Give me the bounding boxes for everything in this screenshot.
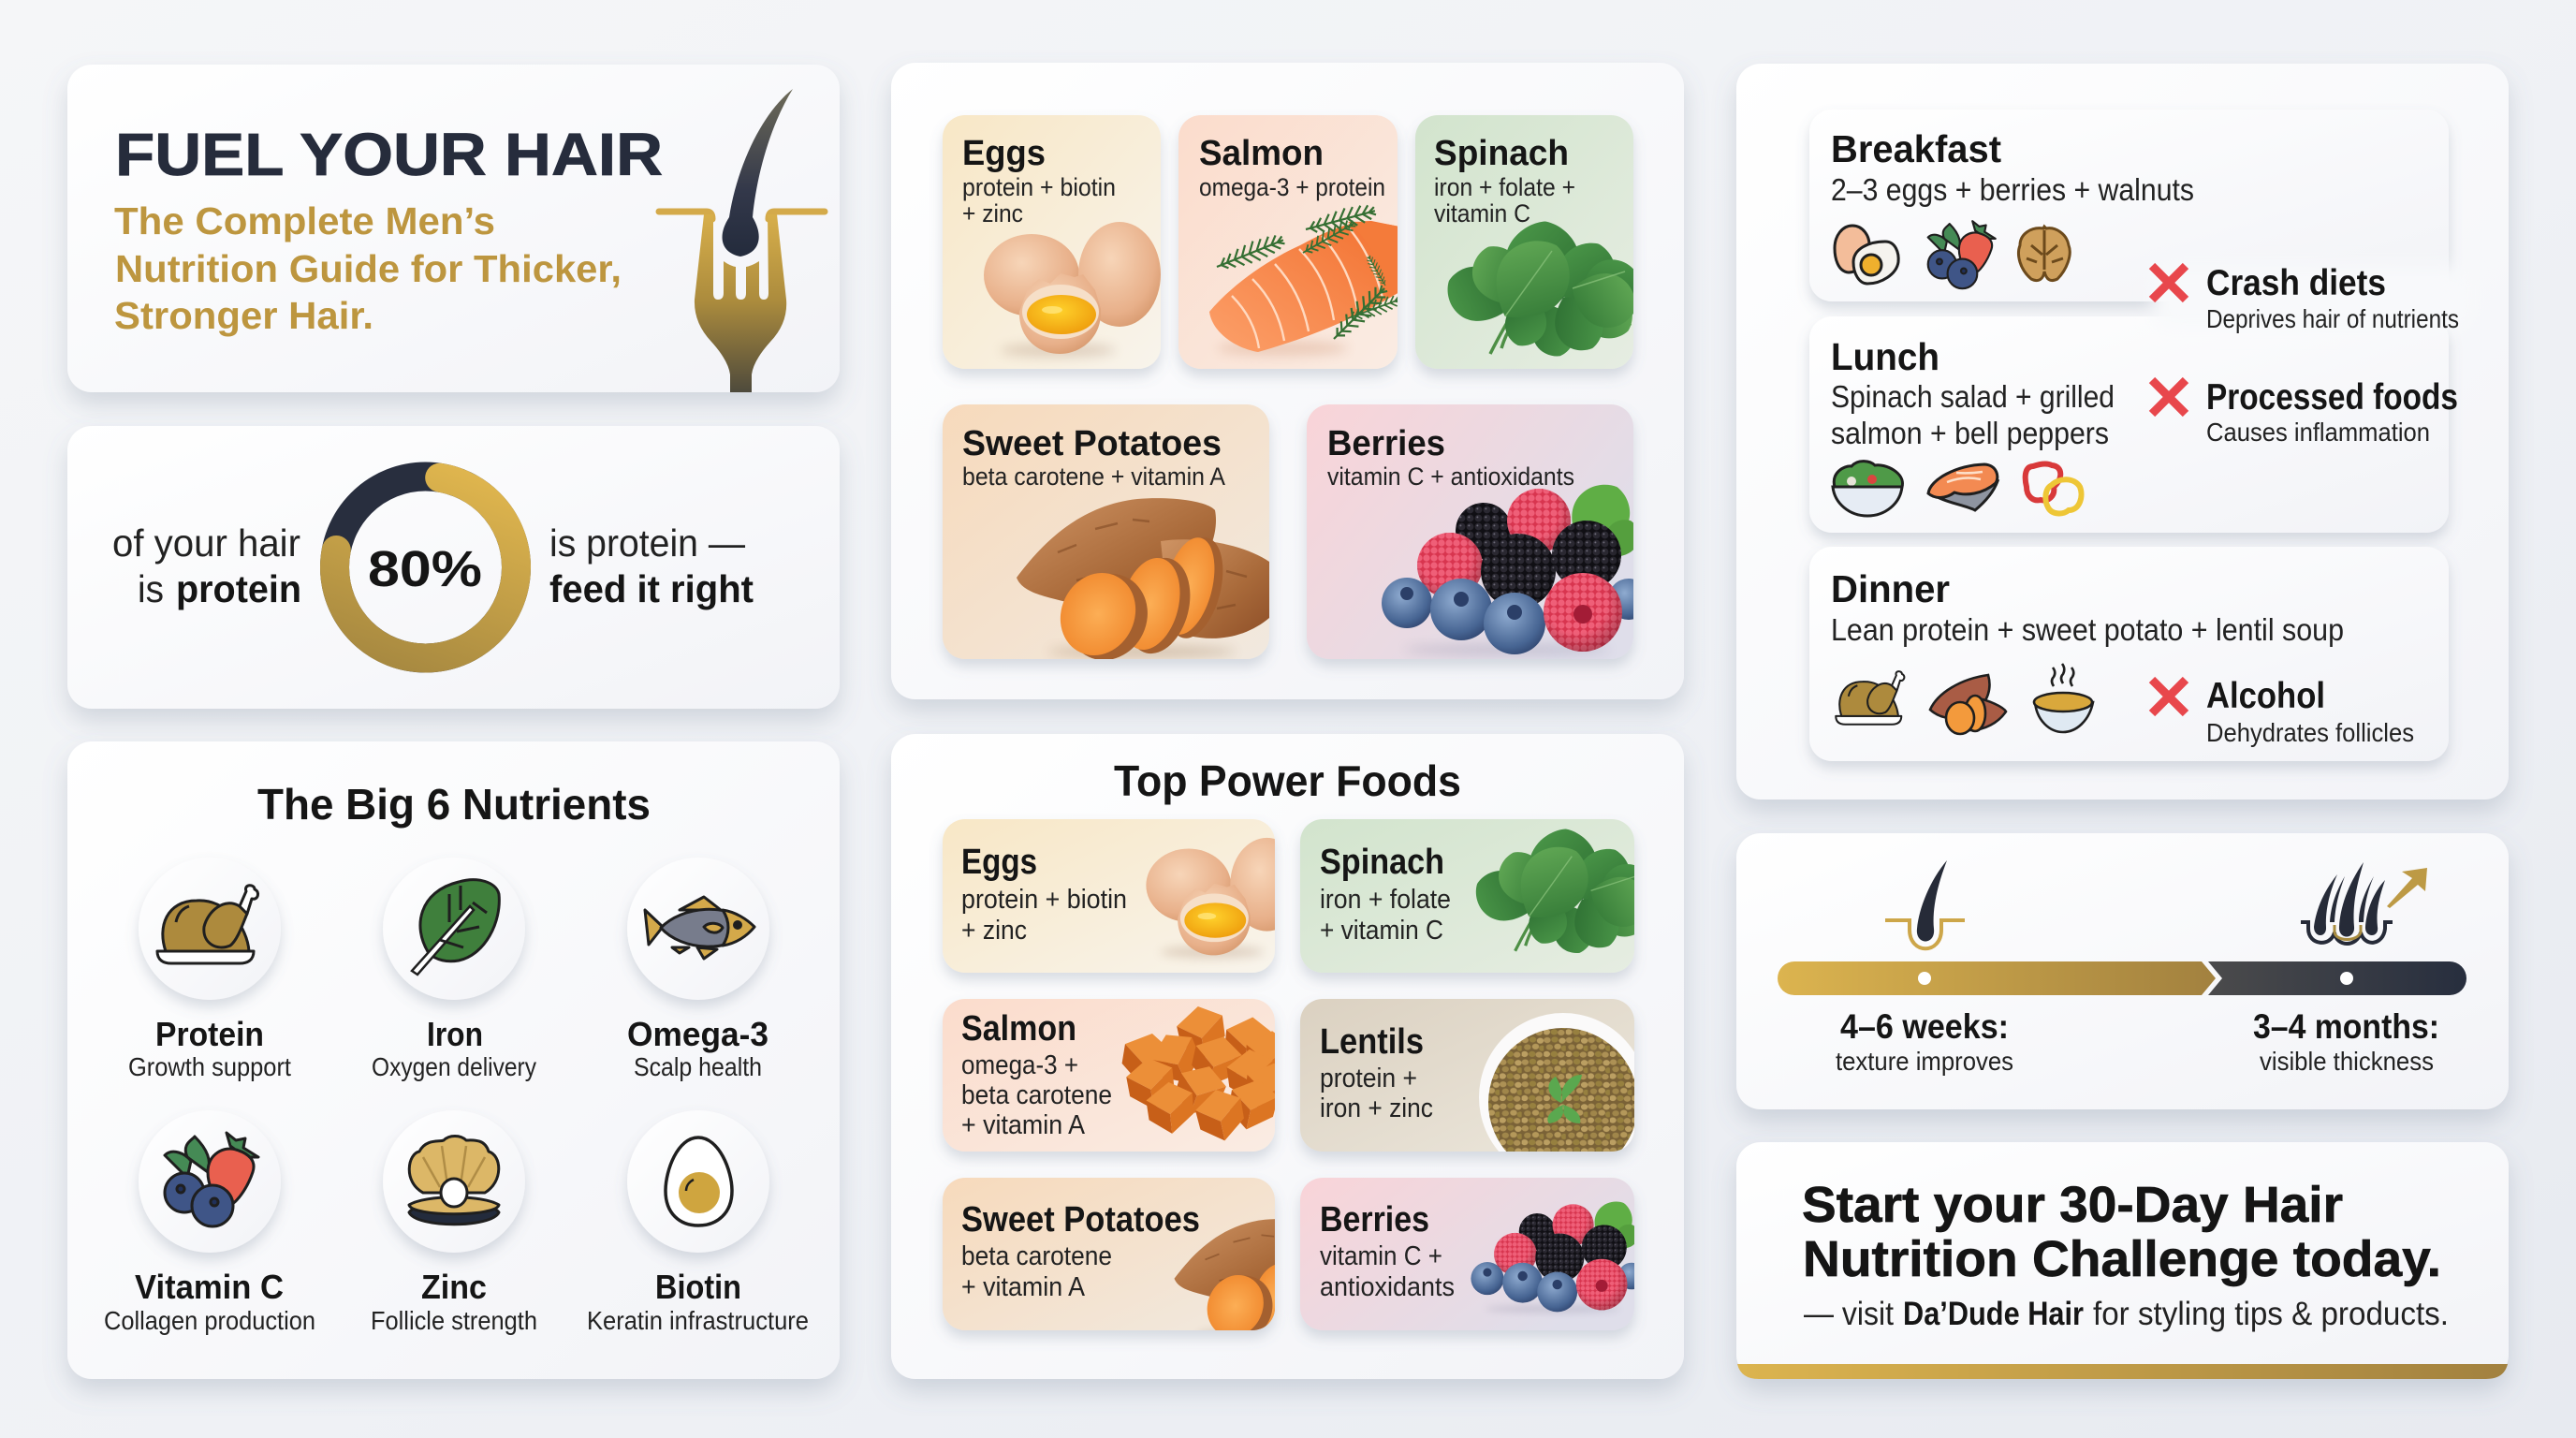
text: visit da'dude hair: for styling tips & products. bbox=[2093, 1296, 2449, 1332]
avoid: processed foods bbox=[2152, 377, 2458, 447]
milestone: 3-4 months: 3–4 months: bbox=[2253, 1007, 2439, 1046]
text: visit da'dude hair: — visit bbox=[1804, 1296, 1894, 1332]
card: dinner: Lean protein + sweet potato + lentil soup bbox=[1831, 612, 2344, 647]
milestone: 4-6 weeks: texture improves bbox=[1836, 1047, 2013, 1076]
fade over card corners bbox=[2153, 266, 2471, 330]
nutrient: biotin bbox=[587, 1110, 809, 1335]
panel: meal plan and foods to avoid bbox=[1736, 64, 2509, 800]
nutrient: protein bbox=[128, 858, 291, 1081]
text: visit da'dude hair: Da’Dude Hair bbox=[1903, 1296, 2084, 1332]
nutrient: iron: Iron bbox=[427, 1015, 483, 1053]
icon: salmon steak bbox=[1928, 464, 1998, 510]
panel: title bbox=[67, 65, 840, 392]
card: lentils: iron + zinc bbox=[1320, 1093, 1433, 1123]
card: breakfast bbox=[1809, 110, 2449, 301]
card: eggs: + zinc bbox=[961, 916, 1027, 946]
card: sweet potatoes: Sweet Potatoes bbox=[961, 1200, 1200, 1240]
nutrient: iron: Oxygen delivery bbox=[372, 1052, 536, 1081]
heading: 30-day challenge: Start your 30-Day Hair bbox=[1802, 1177, 2343, 1233]
icon: salad bbox=[1833, 462, 1902, 516]
timeline bar bbox=[1778, 961, 2466, 995]
avoid: alcohol: Alcohol bbox=[2206, 676, 2325, 716]
card: breakfast: Breakfast bbox=[1831, 127, 2001, 170]
heading: Top Power Foods bbox=[1114, 756, 1461, 805]
text: is protein feed it right: feed it right bbox=[549, 567, 754, 610]
card: lentils: protein + bbox=[1320, 1064, 1417, 1093]
card: sweet potatoes: beta carotene bbox=[961, 1241, 1112, 1271]
subtitle: Stronger Hair. bbox=[114, 294, 373, 337]
card: spinach: + vitamin C bbox=[1320, 916, 1443, 946]
milestone: 3-4 months bbox=[2253, 1007, 2439, 1076]
card: sweet potatoes: Sweet Potatoes bbox=[962, 424, 1222, 463]
nutrient: iron bbox=[372, 858, 536, 1081]
card: berries: antioxidants bbox=[1320, 1272, 1455, 1302]
card: lentils: Lentils bbox=[1320, 1022, 1424, 1062]
heading: 30-day challenge bbox=[1802, 1177, 2441, 1287]
card: salmon bbox=[1178, 115, 1404, 369]
avoid: processed foods: Causes inflammation bbox=[2206, 418, 2430, 447]
panel: food photo cards bbox=[891, 63, 1684, 699]
icon: thick hair with arrow bbox=[2301, 862, 2427, 944]
card: sweet potatoes: beta carotene + vitamin A bbox=[962, 462, 1225, 491]
card: salmon cubes: + vitamin A bbox=[961, 1110, 1086, 1140]
card: dinner bbox=[1809, 547, 2449, 761]
panel: the big 6 nutrients bbox=[67, 741, 840, 1379]
card: spinach: iron + folate bbox=[1320, 885, 1451, 915]
avoid: processed foods: Processed foods bbox=[2206, 377, 2458, 418]
avoid: crash diets: Crash diets bbox=[2206, 263, 2386, 303]
nutrient: zinc bbox=[371, 1110, 537, 1335]
text: is protein feed it right: is protein — bbox=[549, 521, 745, 565]
panel: top power foods bbox=[891, 734, 1684, 1379]
card: salmon: Salmon bbox=[1199, 134, 1324, 173]
card: salmon cubes: omega-3 + bbox=[961, 1050, 1078, 1080]
card: berries: vitamin C + bbox=[1320, 1241, 1442, 1271]
card: eggs: protein + biotin bbox=[961, 885, 1127, 915]
card: spinach bbox=[1415, 115, 1647, 369]
panel: 80 percent stat bbox=[67, 426, 840, 709]
avoid: alcohol: Dehydrates follicles bbox=[2206, 718, 2414, 747]
subtitle: Nutrition Guide for Thicker, bbox=[115, 247, 622, 290]
card: sweet potatoes bbox=[943, 404, 1269, 673]
card: salmon cubes bbox=[943, 999, 1296, 1152]
text: of your hair is protein bbox=[112, 521, 301, 610]
card: berries: Berries bbox=[1327, 424, 1445, 463]
panel: call to action bbox=[1736, 1142, 2509, 1379]
icon: sweet potato bbox=[1930, 675, 2006, 734]
card: eggs bbox=[943, 115, 1161, 369]
nutrient: biotin: Keratin infrastructure bbox=[587, 1306, 809, 1335]
card: dinner: Dinner bbox=[1831, 567, 1950, 610]
card: sweet potatoes: + vitamin A bbox=[961, 1272, 1086, 1302]
chart: 80 percent donut bbox=[335, 477, 517, 658]
icon: chicken bbox=[1836, 671, 1904, 725]
card: spinach bbox=[1300, 819, 1659, 973]
nutrient: omega-3 bbox=[627, 858, 769, 1081]
nutrient: protein: Protein bbox=[155, 1015, 264, 1053]
card: berries bbox=[1300, 1178, 1645, 1330]
card: lunch: Spinach salad + grilled bbox=[1831, 379, 2115, 414]
icon: berries bbox=[1928, 221, 1996, 288]
text: visit da'dude hair bbox=[1804, 1296, 2449, 1332]
card: eggs: + zinc bbox=[962, 199, 1023, 227]
heading: fuel your hair: FUEL YOUR HAIR bbox=[115, 121, 663, 188]
card: spinach: vitamin C bbox=[1434, 199, 1530, 227]
panel: results timeline bbox=[1736, 833, 2509, 1109]
subtitle bbox=[114, 199, 622, 337]
chart: 80 percent donut: 80% bbox=[368, 541, 482, 597]
card: sweet potatoes bbox=[938, 1178, 1280, 1343]
card: eggs: protein + biotin bbox=[962, 173, 1116, 201]
card: lunch bbox=[1809, 316, 2449, 533]
icon: fork with hair bbox=[659, 89, 825, 392]
card: eggs: Eggs bbox=[962, 134, 1046, 173]
card: berries bbox=[1307, 404, 1649, 659]
nutrient: zinc: Zinc bbox=[421, 1268, 487, 1306]
icon: walnut bbox=[2018, 227, 2070, 281]
avoid: crash diets: Deprives hair of nutrients bbox=[2206, 304, 2459, 333]
heading: 30-day challenge: Nutrition Challenge today. bbox=[1803, 1231, 2441, 1287]
milestone: 4-6 weeks bbox=[1836, 1007, 2013, 1076]
nutrient: biotin: Biotin bbox=[655, 1268, 741, 1306]
avoid: crash diets bbox=[2152, 263, 2459, 333]
heading: The Big 6 Nutrients bbox=[257, 780, 651, 829]
nutrient: protein: Growth support bbox=[128, 1052, 291, 1081]
card: spinach: Spinach bbox=[1320, 843, 1444, 882]
card: lunch: Lunch bbox=[1831, 335, 1939, 378]
milestone: 4-6 weeks: 4–6 weeks: bbox=[1840, 1007, 2009, 1046]
nutrient: omega-3: Scalp health bbox=[634, 1052, 762, 1081]
icon: bell peppers bbox=[2026, 463, 2082, 513]
card: breakfast: 2–3 eggs + berries + walnuts bbox=[1831, 172, 2194, 207]
card: salmon cubes: Salmon bbox=[961, 1009, 1076, 1049]
card: spinach: Spinach bbox=[1434, 134, 1569, 173]
gold accent strip bbox=[1737, 1364, 2508, 1379]
nutrient: vitamin c: Collagen production bbox=[104, 1306, 315, 1335]
nutrient: zinc: Follicle strength bbox=[371, 1306, 537, 1335]
card: spinach: iron + folate + bbox=[1434, 173, 1575, 201]
avoid: alcohol bbox=[2152, 676, 2414, 747]
nutrient: vitamin c: Vitamin C bbox=[135, 1268, 284, 1306]
nutrient: vitamin c bbox=[104, 1110, 315, 1335]
icon: soup bbox=[2034, 664, 2093, 732]
text: of your hair is protein: of your hair bbox=[112, 521, 300, 565]
card: berries: vitamin C + antioxidants bbox=[1327, 462, 1574, 491]
subtitle: The Complete Men’s bbox=[114, 199, 495, 242]
nutrient: omega-3: Omega-3 bbox=[627, 1015, 768, 1053]
card: eggs: Eggs bbox=[961, 843, 1037, 882]
card: lunch: salmon + bell peppers bbox=[1831, 416, 2109, 450]
card: lentils bbox=[1295, 999, 1638, 1164]
card: salmon: omega-3 + protein bbox=[1199, 173, 1385, 201]
icon: eggs bbox=[1835, 226, 1898, 284]
text: is protein feed it right bbox=[549, 521, 754, 610]
card: salmon cubes: beta carotene bbox=[961, 1080, 1112, 1110]
card: berries: Berries bbox=[1320, 1200, 1429, 1240]
text: of your hair is protein: protein bbox=[176, 567, 301, 610]
icon: single hair follicle bbox=[1885, 860, 1965, 948]
card: eggs bbox=[943, 819, 1304, 973]
milestone: 3-4 months: visible thickness bbox=[2260, 1047, 2434, 1076]
text: of your hair is protein: is bbox=[138, 567, 164, 610]
